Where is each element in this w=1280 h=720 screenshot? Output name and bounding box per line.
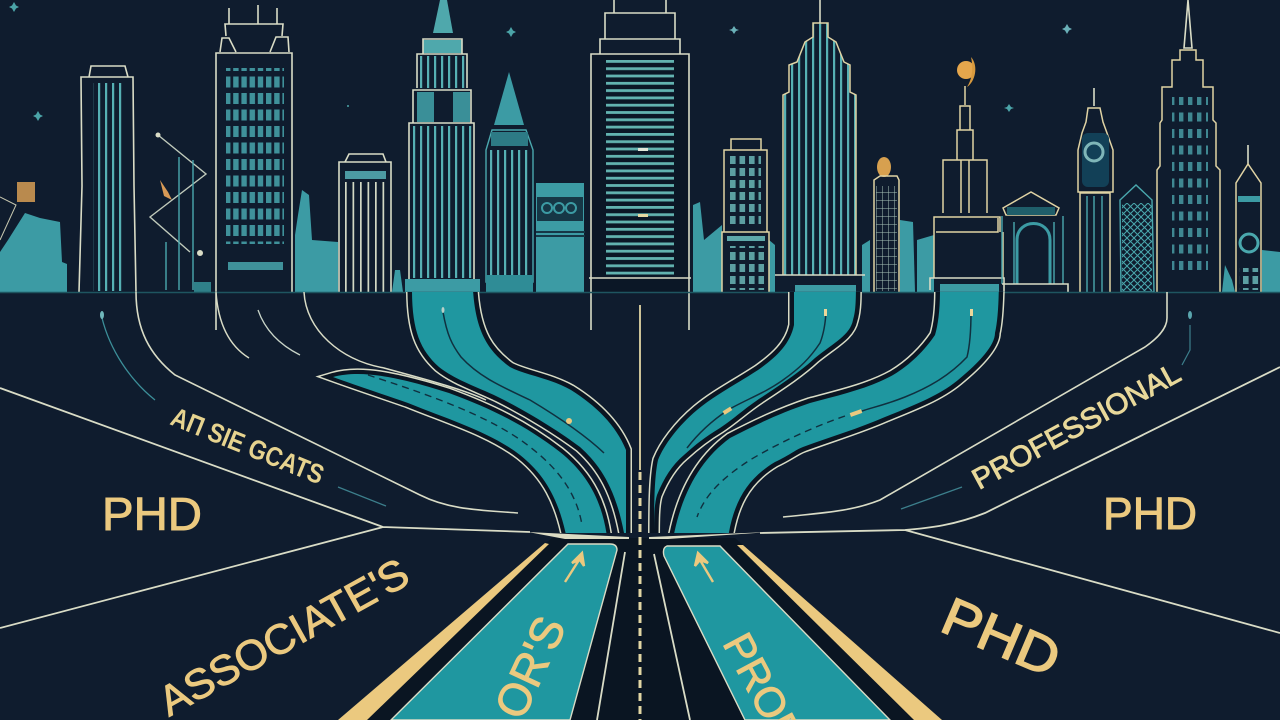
building: low ornate block xyxy=(536,197,585,236)
skyline teal backdrop xyxy=(295,183,1280,292)
lane marker lines: right field xyxy=(783,292,1190,517)
road: right second lane xyxy=(672,270,999,545)
bottom road: right teal lane xyxy=(654,546,890,720)
boundary lines: right xyxy=(760,367,1280,633)
building: arched gate xyxy=(1002,192,1068,292)
arrow: left lane up xyxy=(565,553,584,582)
building: columned block xyxy=(339,154,391,292)
label: garbled associate's: AΠ SIE GCATS xyxy=(167,402,328,490)
label: Professional: PROFESSIONAL xyxy=(967,357,1186,496)
building: window block xyxy=(722,139,769,292)
stars xyxy=(9,2,1072,121)
lane marker dot xyxy=(100,311,104,319)
lane marker lines: left field xyxy=(102,292,518,513)
road: left branch lane xyxy=(333,374,608,545)
label: PHD left: PHD xyxy=(102,488,202,540)
road: left upper lane xyxy=(412,270,626,545)
building: right skyscraper xyxy=(1157,0,1220,292)
horizon crossing band xyxy=(528,532,770,539)
gold stripe: left xyxy=(338,543,549,720)
lane marker dot: right xyxy=(1188,311,1192,319)
bottom road: left teal lane xyxy=(391,544,625,720)
building: empire-style tower xyxy=(405,0,480,293)
building: left monument xyxy=(0,182,67,292)
centre line xyxy=(639,305,641,720)
building: moon tower xyxy=(930,57,1004,292)
building: striped tower xyxy=(79,66,136,292)
building: stepped spire tower xyxy=(775,0,865,293)
skyline ground line xyxy=(0,292,1280,294)
boundary lines: left xyxy=(0,388,530,628)
building: small right spire xyxy=(1236,145,1261,292)
building: lattice block xyxy=(1120,185,1154,292)
building: clock tower xyxy=(1078,88,1113,292)
gold stripe: right xyxy=(737,545,942,720)
building: grid tower with gold orb xyxy=(874,157,899,292)
road: right first lane xyxy=(654,270,856,545)
label: Associate's: ASSOCIATE'S xyxy=(151,549,417,720)
building: crane lines xyxy=(150,132,211,292)
building: central tower xyxy=(589,0,691,330)
label: PHD right: PHD xyxy=(1103,488,1197,539)
label: PHD large: PHD xyxy=(933,587,1069,689)
building: cone tower xyxy=(486,72,533,292)
building: tall window tower xyxy=(216,5,292,330)
arrow: right lane up xyxy=(695,553,713,582)
dark road surface below horizon xyxy=(338,538,942,720)
